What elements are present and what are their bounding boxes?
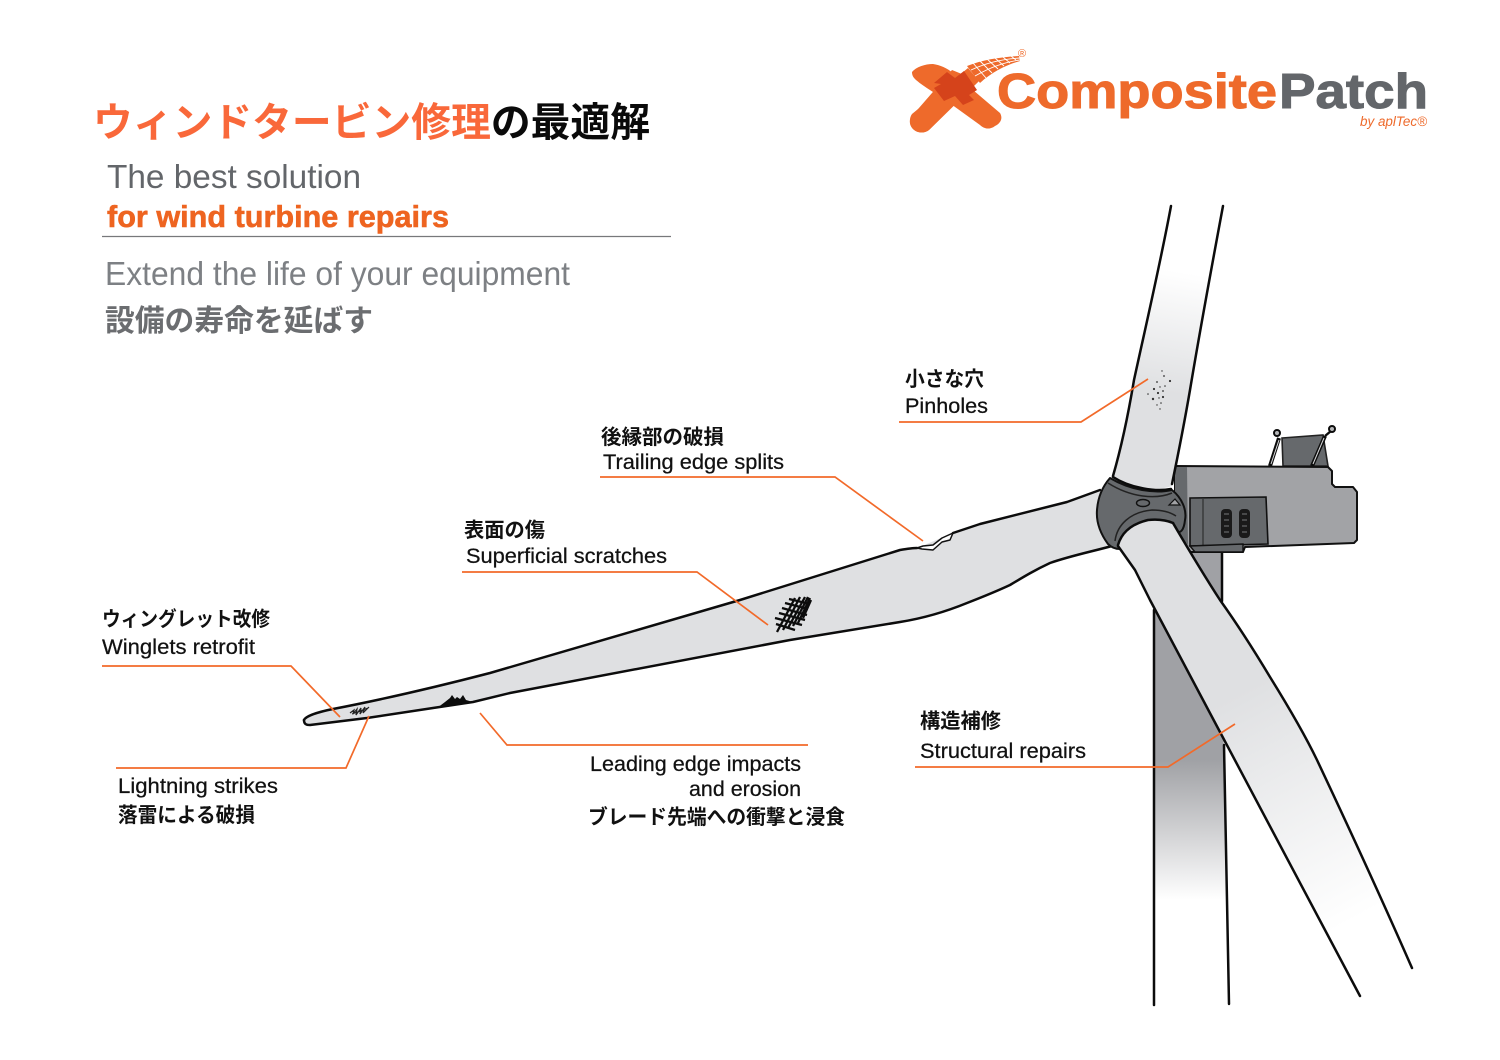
label: scratches english: Superficial scratches: [466, 545, 667, 568]
leader line: structural: [915, 724, 1235, 767]
label: lightning english: Lightning strikes: [118, 775, 278, 798]
label: scratches japanese: 表面の傷: [464, 513, 545, 543]
leader line: trailing edge: [600, 477, 923, 541]
leader line: leading edge: [480, 713, 808, 745]
leader line: scratches: [462, 572, 768, 625]
label: leading edge english line 1: Leading edge impacts: [590, 753, 801, 776]
label: trailing edge japanese: 後縁部の破損: [601, 420, 724, 450]
label: trailing edge english: Trailing edge splits: [603, 451, 784, 474]
wind turbine: [304, 206, 1412, 1005]
damage: superficial scratches: [775, 597, 811, 632]
label: winglets japanese: ウィングレット改修: [102, 602, 271, 632]
damage: leading edge erosion: [437, 695, 473, 708]
blade: left: [304, 490, 1112, 725]
label: pinholes english: Pinholes: [905, 395, 988, 418]
label: pinholes japanese: 小さな穴: [905, 362, 984, 392]
callout: superficial scratches: [462, 513, 768, 625]
leader line: pinholes: [899, 379, 1148, 422]
callout: lightning strikes: [116, 716, 369, 828]
callout: winglets retrofit: [102, 602, 340, 717]
logo registered mark: ®: [1018, 48, 1026, 60]
title: ウィンドタービン修理の最適解: [93, 90, 650, 148]
label: structural japanese: 構造補修: [920, 704, 1002, 734]
side panel: [1190, 497, 1268, 552]
subheading: japanese extend life: 設備の寿命を延ばす: [105, 296, 373, 340]
leader line: winglets: [102, 666, 340, 717]
callout: structural repairs: [915, 704, 1235, 767]
nacelle: [1175, 426, 1357, 552]
damage: pinholes: [1147, 370, 1171, 410]
logo tagline: by aplTec®: [1360, 114, 1427, 129]
subheading: extend life: Extend the life of your equipment: [105, 255, 570, 292]
icon: crossed bandage: [910, 56, 1020, 133]
damage: lightning strikes: [350, 707, 369, 715]
label: leading edge japanese: ブレード先端への衝撃と浸食: [588, 800, 845, 830]
callout: pinholes: [899, 362, 1148, 422]
label: structural english: Structural repairs: [920, 740, 1086, 763]
roof unit: [1270, 426, 1335, 466]
logo word: Composite: Composite: [997, 65, 1277, 119]
label: winglets english: Winglets retrofit: [102, 636, 255, 659]
callout: leading edge impacts: [480, 713, 845, 830]
blade: right: [1118, 520, 1412, 997]
heading: for wind turbine repairs: for wind turbine repairs: [107, 199, 449, 234]
label: leading edge english line 2: and erosion: [689, 778, 801, 801]
damage: trailing edge split: [917, 533, 953, 550]
leader line: lightning: [116, 716, 369, 768]
label: lightning japanese: 落雷による破損: [118, 798, 255, 828]
logo word: Patch: Patch: [1279, 65, 1428, 119]
tower: [1154, 552, 1229, 1005]
logo: CompositePatch: [910, 48, 1428, 133]
hub: [1097, 478, 1185, 549]
callout: trailing edge splits: [600, 420, 923, 541]
blade: top: [1113, 206, 1223, 490]
heading: best solution: The best solution: [107, 158, 361, 195]
nacelle body: [1175, 466, 1357, 552]
